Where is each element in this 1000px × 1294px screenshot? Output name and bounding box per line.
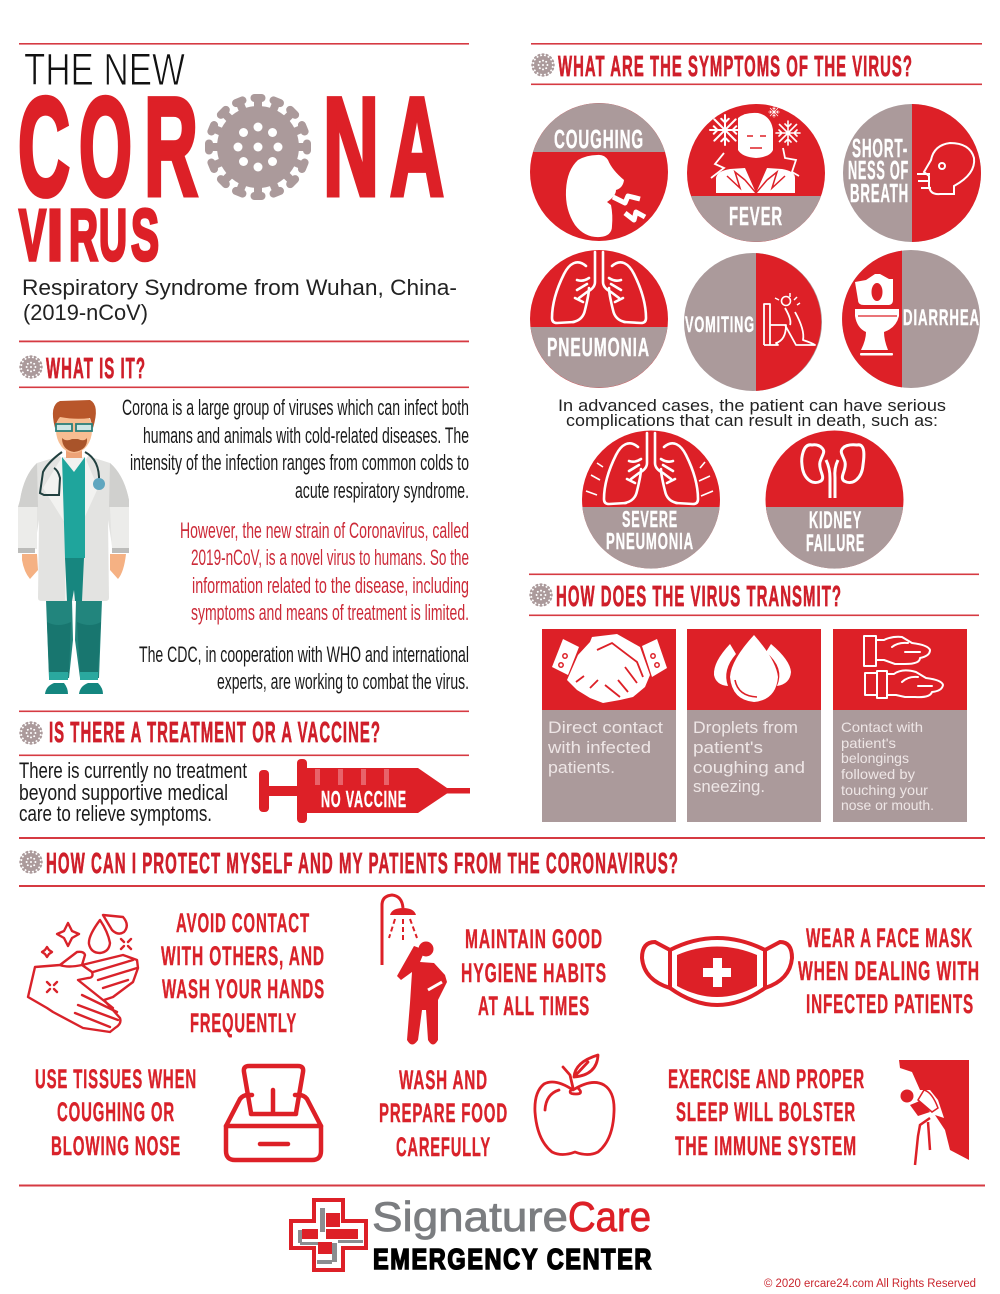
- logo: signature care: Care: [568, 1193, 651, 1240]
- heading: what is it: WHAT IS IT?: [46, 353, 146, 385]
- text: exercise: THE IMMUNE SYSTEM: [675, 1131, 857, 1161]
- text: hygiene: AT ALL TIMES: [478, 991, 590, 1021]
- text: tissues: COUGHING OR: [57, 1097, 175, 1127]
- text: hygiene: [461, 924, 607, 1021]
- text block: new strain: information related to the disease, including: [192, 573, 469, 598]
- icon: syringe no vaccine: [259, 759, 470, 823]
- text block: cdc: [139, 642, 469, 694]
- text block: cdc: experts, are working to combat the virus.: [217, 669, 469, 694]
- panel: belongings: nose or mouth.: [841, 797, 934, 813]
- panel: shortness of breath: BREATH: [850, 178, 909, 208]
- title: na: N: [323, 68, 379, 225]
- text: avoid contact: WASH YOUR HANDS: [162, 974, 325, 1004]
- text block: treatment: beyond supportive medical: [19, 780, 228, 805]
- title: virus: U: [99, 196, 127, 276]
- text: avoid contact: [161, 908, 325, 1038]
- panel: coughing: COUGHING: [554, 124, 644, 154]
- text: food: CAREFULLY: [396, 1132, 491, 1162]
- panel: belongings: Contact with: [841, 719, 923, 735]
- panel: droplets: coughing and: [693, 758, 805, 777]
- panel: belongings: followed by: [841, 766, 915, 782]
- title: the new: THE NEW: [24, 44, 185, 95]
- panel: severe pneumonia: [582, 430, 720, 569]
- panel: kidney failure: KIDNEY: [809, 507, 862, 534]
- panel: kidney failure: FAILURE: [806, 530, 865, 557]
- title: virus: S: [131, 196, 159, 276]
- text: food: [379, 1065, 508, 1162]
- text: food: WASH AND: [399, 1065, 488, 1095]
- illustration: doctor: [18, 400, 129, 694]
- title: virus: I: [47, 196, 63, 276]
- icon: tissue box: [226, 1066, 321, 1160]
- title: cor: [18, 68, 198, 225]
- icon: apple: [535, 1055, 614, 1154]
- logo: signature care: EMERGENCY CENTER: [373, 1244, 653, 1276]
- title: cor: R: [144, 68, 198, 225]
- panel: shortness of breath: NESS OF: [848, 155, 909, 185]
- title: virus: V: [19, 196, 46, 276]
- title: na: A: [390, 68, 444, 225]
- icon: coronavirus: [205, 94, 311, 200]
- icon: washing hands: [28, 915, 138, 1032]
- heading: transmit: [529, 581, 842, 613]
- text block: what is it: [122, 395, 469, 503]
- text: tissues: [35, 1064, 197, 1161]
- panel: droplets: patient's: [693, 738, 763, 757]
- panel: direct contact: [542, 629, 676, 822]
- copyright: © 2020 ercare24.com All Rights Reserved: [764, 1278, 976, 1290]
- text block: treatment: [19, 758, 247, 826]
- text: hygiene: MAINTAIN GOOD: [465, 924, 603, 954]
- icon: syringe no vaccine: NO VACCINE: [321, 786, 407, 812]
- icon: handshake: [552, 634, 667, 703]
- text block: what is it: Corona is a large group of viruses which can infect both: [122, 395, 469, 420]
- text block: what is it: humans and animals with cold-related diseases. The: [143, 423, 469, 448]
- panel: pneumonia: [530, 250, 668, 388]
- heading: treatment or vaccine: [19, 717, 381, 749]
- text: food: PREPARE FOOD: [379, 1098, 508, 1128]
- text block: cdc: The CDC, in cooperation with WHO and international: [139, 642, 469, 667]
- panel: severe pneumonia: PNEUMONIA: [606, 528, 694, 554]
- text block: new strain: [180, 518, 469, 625]
- text: tissues: BLOWING NOSE: [51, 1131, 181, 1161]
- panel: droplets: Droplets from: [693, 718, 798, 737]
- text: exercise: SLEEP WILL BOLSTER: [676, 1097, 856, 1127]
- icon: face mask: [642, 938, 792, 1005]
- panel: droplets: sneezing.: [693, 777, 765, 796]
- title: cor: O: [79, 68, 132, 225]
- text block: treatment: care to relieve symptoms.: [19, 801, 212, 826]
- text block: what is it: acute respiratory syndrome.: [295, 478, 469, 503]
- panel: belongings: patient's: [841, 735, 896, 751]
- text block: new strain: However, the new strain of Coronavirus, called: [180, 518, 469, 543]
- panel: belongings: belongings: [841, 750, 909, 766]
- text: hygiene: HYGIENE HABITS: [461, 958, 607, 988]
- panel: fever: FEVER: [729, 201, 783, 231]
- icon: droplets: [714, 635, 791, 702]
- subtitle: (2019-nCoV): [23, 300, 148, 325]
- title block: [18, 44, 457, 325]
- subtitle: Respiratory Syndrome from Wuhan, China-: [22, 275, 457, 300]
- text: avoid contact: WITH OTHERS, AND: [161, 941, 325, 971]
- logo: signature care: Signature: [372, 1193, 568, 1240]
- icon: shower person: [382, 895, 447, 1044]
- heading: what is it: [19, 353, 146, 385]
- icon: hands: [864, 636, 943, 698]
- panel: vomiting: [684, 253, 822, 391]
- text: face mask: [798, 923, 980, 1019]
- panel: shortness of breath: SHORT-: [852, 133, 908, 163]
- panel: vomiting: VOMITING: [685, 312, 755, 337]
- icon: logo cross: [289, 1198, 368, 1272]
- panel: direct contact: with infected: [547, 738, 651, 757]
- text: avoid contact: FREQUENTLY: [190, 1008, 297, 1038]
- panel: severe pneumonia: SEVERE: [622, 506, 678, 532]
- panel: kidney failure: [766, 430, 904, 569]
- panel: belongings: touching your: [841, 782, 928, 798]
- heading: protect: [19, 848, 679, 880]
- text: exercise: [668, 1064, 865, 1161]
- text: tissues: USE TISSUES WHEN: [35, 1064, 197, 1094]
- panel: coughing: [530, 103, 668, 241]
- text block: advanced cases: [558, 396, 946, 430]
- text block: advanced cases: complications that can result in death, such as:: [566, 411, 938, 430]
- panel: direct contact: Direct contact: [548, 718, 663, 737]
- text block: new strain: symptoms and means of treatment is limited.: [191, 600, 469, 625]
- logo: signature care: [289, 1193, 653, 1276]
- panel: fever: [687, 104, 825, 242]
- title: virus: R: [69, 196, 98, 276]
- panel: belongings: [833, 629, 967, 822]
- text: avoid contact: AVOID CONTACT: [176, 908, 310, 938]
- text block: advanced cases: In advanced cases, the patient can have serious: [558, 396, 946, 415]
- panel: droplets: [687, 629, 821, 822]
- panel: shortness of breath: [843, 104, 981, 242]
- panel: direct contact: patients.: [548, 758, 615, 777]
- title: cor: C: [18, 68, 70, 225]
- panel: pneumonia: PNEUMONIA: [547, 332, 650, 362]
- text block: treatment: There is currently no treatment: [19, 758, 247, 783]
- text block: what is it: intensity of the infection ranges from common colds to: [130, 450, 469, 475]
- heading: treatment or vaccine: IS THERE A TREATMENT OR A VACCINE?: [49, 717, 381, 749]
- title: virus: [19, 196, 159, 276]
- text block: new strain: 2019-nCoV, is a novel virus to humans. So the: [191, 545, 469, 570]
- panel: diarrhea: [842, 250, 980, 388]
- icon: climber: [899, 1060, 969, 1165]
